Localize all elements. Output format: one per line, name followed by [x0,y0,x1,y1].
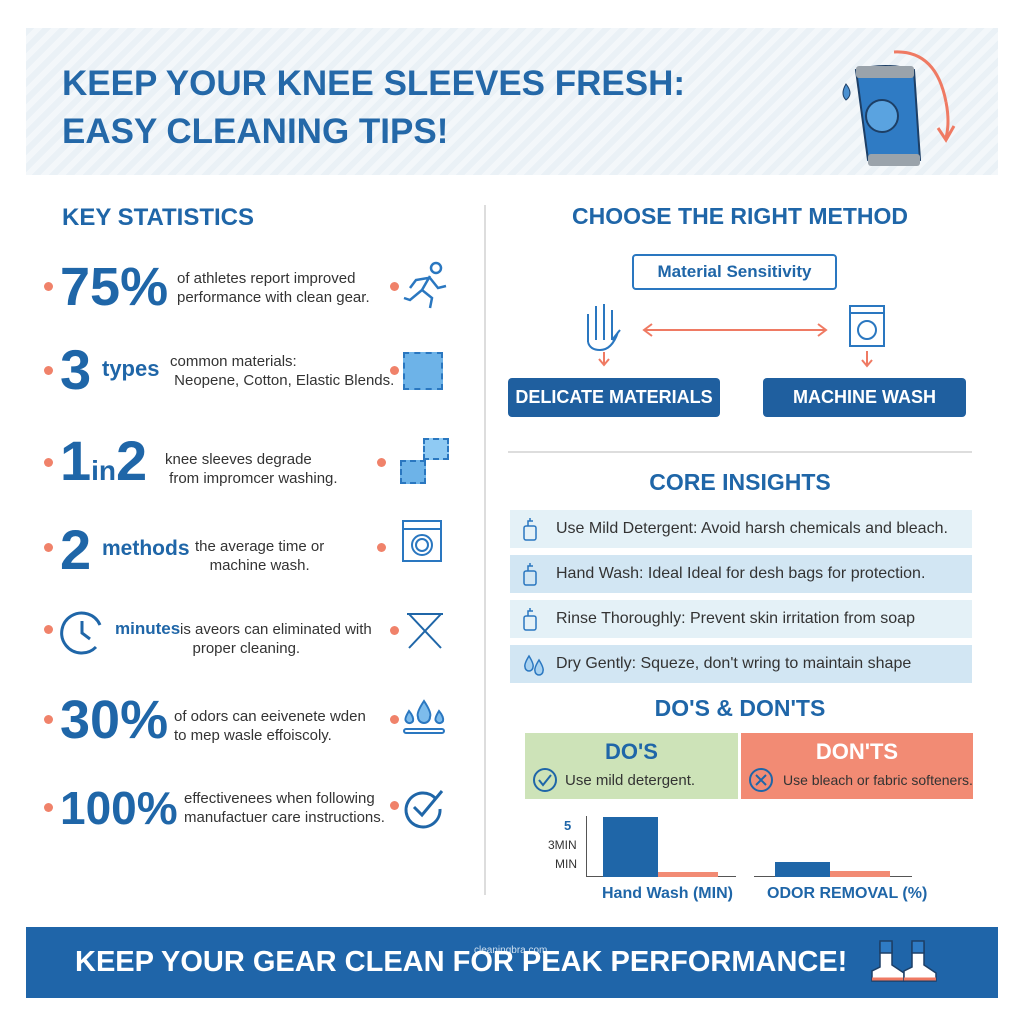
stat 100%: effectivenees when following [184,790,375,807]
insight 2: Hand Wash: Ideal Ideal for desh bags for protection. [556,565,925,582]
stat minutes: proper cleaning. [192,640,300,657]
stat 2 methods [44,518,442,581]
stat 2 methods: methods [102,537,190,560]
insight rows [510,510,972,683]
header band [26,28,998,175]
stat 3 types [44,338,443,401]
material sensitivity box [632,254,837,290]
bar chart: Hand Wash (MIN) [602,885,733,902]
panel: dos [525,733,738,799]
stat 2 methods: the average time or [195,538,324,555]
panel: donts: DON'TS [816,739,898,764]
stat 30%: 30% [60,690,168,750]
stat 3 types: common materials: [170,353,297,370]
stat 100%: manufactuer care instructions. [184,809,385,826]
bar chart: 5 [564,818,571,833]
insight 2 [510,555,972,593]
panel: donts: Use bleach or fabric softeners. [783,772,973,788]
stat 75%: performance with clean gear. [177,289,370,306]
button: machine wash: MACHINE WASH [793,387,936,407]
heading: core insights: CORE INSIGHTS [649,469,831,495]
panel: donts [741,733,973,799]
button: machine wash [763,378,966,417]
bar chart: ODOR REMOVAL (%) [767,885,927,902]
stat 3 types: Neopene, Cotton, Elastic Blends. [174,372,394,389]
button: delicate: DELICATE MATERIALS [515,387,713,407]
title: EASY CLEANING TIPS! [62,112,448,151]
stat 75%: of athletes report improved [177,270,355,287]
panel: dos: Use mild detergent. [565,772,695,789]
bar chart: 3MIN [548,838,577,852]
heading: choose method: CHOOSE THE RIGHT METHOD [572,203,908,229]
watermark: cleaningbra.com [474,945,547,956]
bar chart: MIN [555,857,577,871]
icon: sneakers [871,940,937,982]
insight 4 [510,645,972,683]
stat 2 methods: 2 [60,518,91,581]
material sensitivity box: Material Sensitivity [657,262,812,281]
stat 75%: 75% [60,257,168,317]
stat 1 in 2: knee sleeves degrade [165,451,312,468]
footer text: KEEP YOUR GEAR CLEAN FOR PEAK PERFORMANCE! [75,946,847,978]
arrow: double [642,323,828,337]
stat 100% [44,782,444,834]
stat rows [44,257,449,834]
stat 75% [44,257,446,317]
stat 30%: of odors can eeivenete wden [174,708,366,725]
button: delicate [508,378,720,417]
insight 3: Rinse Thoroughly: Prevent skin irritation from soap [556,610,915,627]
title [62,64,685,151]
insight 3 [510,600,972,638]
stat 30% [44,690,445,750]
stat 30%: to mep wasle effoiscoly. [174,727,332,744]
stat 1 in 2 [44,429,449,492]
icon: washing machine [849,305,885,368]
insight 1 [510,510,972,548]
stat 1 in 2: 1in2 [60,429,147,492]
stat 1 in 2: from impromcer washing. [169,470,338,487]
footer band [26,927,998,998]
heading: dos and donts: DO'S & DON'TS [655,695,825,721]
bar chart [548,816,927,902]
stat minutes [44,612,443,657]
stat 100%: 100% [60,782,178,834]
stat 2 methods: machine wash. [210,557,310,574]
title: KEEP YOUR KNEE SLEEVES FRESH: [62,64,685,103]
icon: glove [587,304,621,366]
stat minutes: minutes [115,619,180,638]
stat 3 types: types [102,356,159,381]
heading: key statistics: KEY STATISTICS [62,204,254,231]
icon: knee sleeve [842,50,956,166]
panel: dos: DO'S [605,739,658,764]
divider [484,205,486,895]
stat 3 types: 3 [60,338,91,401]
insight 1: Use Mild Detergent: Avoid harsh chemicals and bleach. [556,520,948,537]
insight 4: Dry Gently: Squeze, don't wring to maintain shape [556,655,911,672]
stat minutes: is aveors can eliminated with [180,621,372,638]
